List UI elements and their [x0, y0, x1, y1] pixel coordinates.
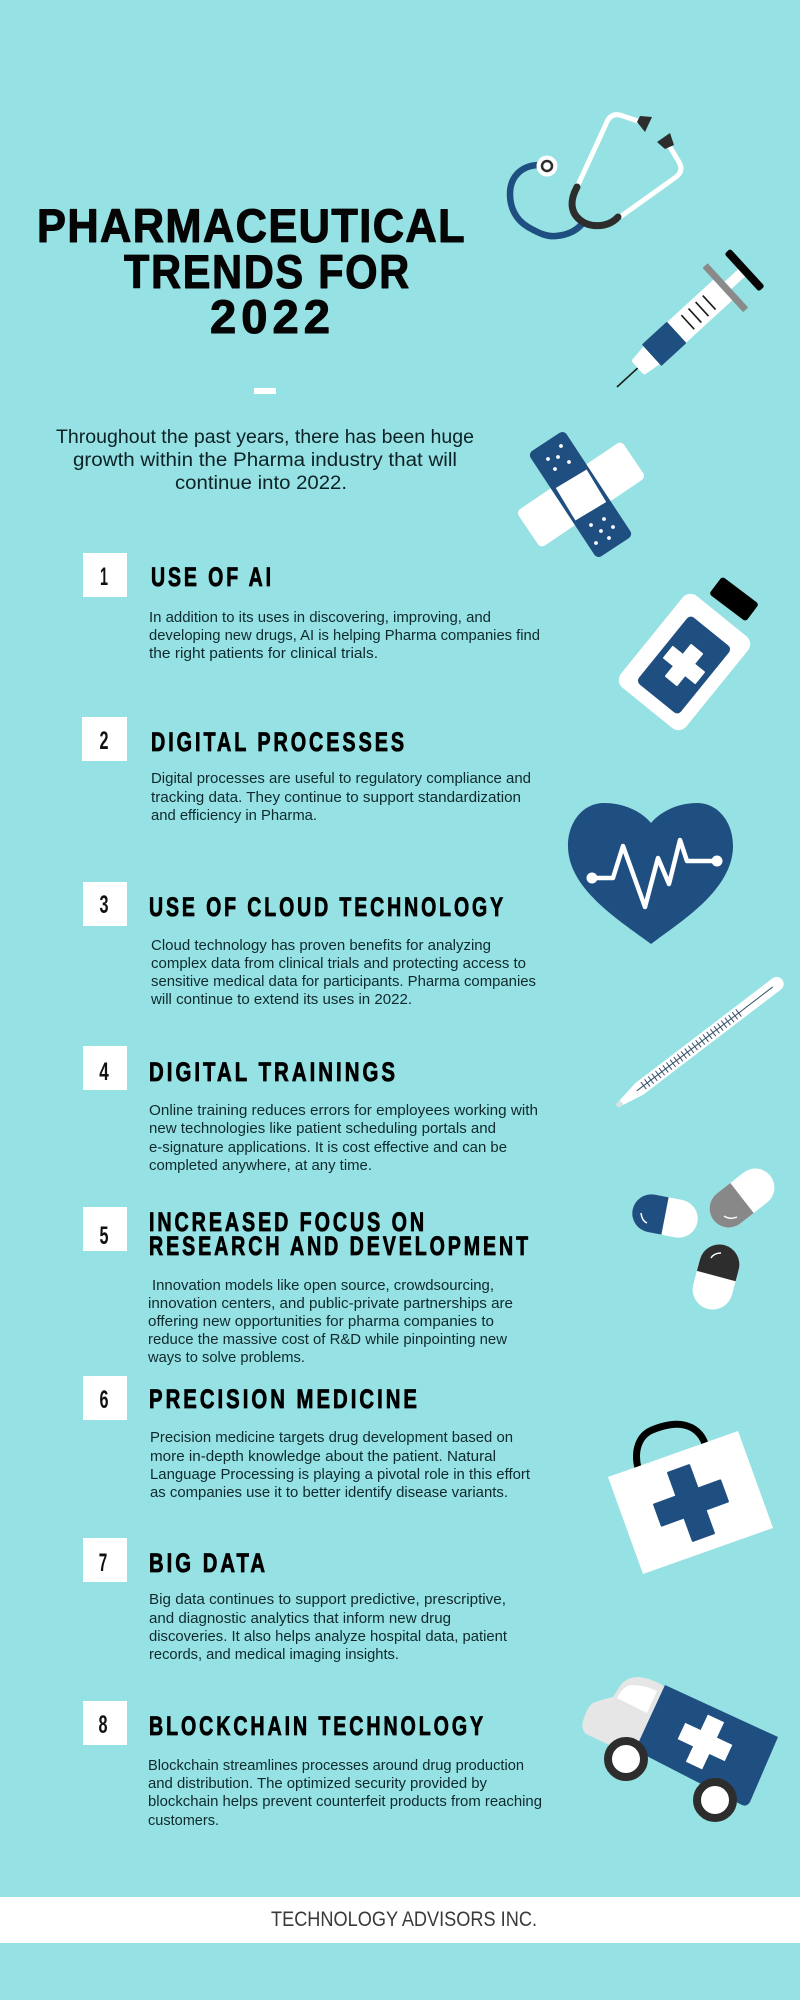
title: PHARMACEUTICAL	[37, 199, 466, 252]
body text 5: ways to solve problems.	[147, 1350, 305, 1366]
number badge 2	[82, 717, 127, 761]
item 5	[83, 1207, 531, 1366]
body text 8: Blockchain streamlines processes around drug production	[148, 1758, 524, 1774]
icon: medicine bottle	[615, 576, 759, 734]
body text 2: tracking data. They continue to support standardization	[151, 790, 521, 806]
body text 7: discoveries. It also helps analyze hospital data, patient	[149, 1629, 507, 1645]
body text 3: complex data from clinical trials and protecting access to	[151, 956, 526, 972]
footer text: TECHNOLOGY ADVISORS INC.	[271, 1907, 537, 1931]
icon: syringe	[597, 245, 768, 409]
icon: ambulance	[582, 1677, 778, 1818]
number badge 3: 3	[100, 891, 108, 919]
heading 5	[149, 1207, 531, 1261]
body text 7: Big data continues to support predictive, prescriptive,	[149, 1592, 506, 1608]
title accent dash	[254, 388, 276, 394]
heading 5: RESEARCH AND DEVELOPMENT	[149, 1231, 531, 1261]
item 2	[82, 717, 531, 824]
body text 6: as companies use it to better identify disease variants.	[150, 1485, 508, 1501]
title: TRENDS FOR	[124, 245, 411, 298]
blue pill	[629, 1191, 701, 1241]
body text 4: Online training reduces errors for employees working with	[149, 1103, 538, 1119]
gray pill	[702, 1161, 782, 1235]
body text 1: In addition to its uses in discovering, improving, and	[149, 610, 491, 626]
body text 5: offering new opportunities for pharma companies to	[148, 1314, 494, 1330]
body text 7: records, and medical imaging insights.	[149, 1647, 399, 1663]
body text 2	[151, 771, 531, 824]
number badge 1	[83, 553, 127, 597]
number badge 3	[83, 882, 127, 926]
black pill	[688, 1240, 744, 1314]
body text 4: completed anywhere, at any time.	[149, 1158, 372, 1174]
body text 3: sensitive medical data for participants. Pharma companies	[151, 974, 536, 990]
number badge 5: 5	[100, 1222, 109, 1250]
body text 2: Digital processes are useful to regulatory compliance and	[151, 771, 531, 787]
item 7	[83, 1538, 507, 1663]
body text 8: blockchain helps prevent counterfeit products from reaching	[148, 1794, 542, 1810]
item 6	[83, 1376, 530, 1501]
heading 6: PRECISION MEDICINE	[149, 1384, 420, 1414]
body text 5: innovation centers, and public-private partnerships are	[148, 1296, 513, 1312]
body text 4	[149, 1103, 538, 1174]
body text 8: customers.	[148, 1813, 219, 1829]
body text 6: more in-depth knowledge about the patient. Natural	[150, 1449, 496, 1465]
title	[37, 199, 466, 343]
intro text	[56, 427, 474, 494]
body text 3: will continue to extend its uses in 2022.	[150, 992, 412, 1008]
intro text: continue into 2022.	[175, 473, 347, 494]
body text 5: Innovation models like open source, crowdsourcing,	[152, 1278, 494, 1294]
body text 5: reduce the massive cost of R&D while pinpointing new	[148, 1332, 508, 1348]
number badge 6: 6	[100, 1386, 108, 1414]
footer band	[0, 1897, 800, 1943]
body text 6: Precision medicine targets drug development based on	[150, 1430, 513, 1446]
number badge 4: 4	[99, 1058, 109, 1086]
number badge 8	[83, 1701, 127, 1745]
body text 6	[150, 1430, 530, 1501]
icon: pills	[629, 1161, 782, 1314]
body text 1	[149, 610, 540, 662]
body text 4: new technologies like patient scheduling portals and	[149, 1121, 496, 1137]
icon: thermometer	[613, 974, 786, 1112]
number badge 8: 8	[98, 1711, 108, 1739]
body text 1: the right patients for clinical trials.	[149, 646, 378, 662]
item 3	[83, 882, 536, 1008]
title: 2022	[210, 290, 335, 343]
body text 6: Language Processing is playing a pivotal role in this effort	[150, 1467, 530, 1483]
body text 7: and diagnostic analytics that inform new drug	[149, 1611, 451, 1627]
number badge 5	[83, 1207, 127, 1251]
item 8	[83, 1701, 542, 1829]
item 1	[83, 553, 540, 662]
body text 8	[148, 1758, 542, 1829]
heading 7: BIG DATA	[149, 1548, 268, 1578]
heading 1: USE OF AI	[151, 562, 274, 592]
body text 3: Cloud technology has proven benefits for analyzing	[151, 938, 491, 954]
body text 8: and distribution. The optimized security provided by	[148, 1776, 488, 1792]
body text 3	[150, 938, 536, 1008]
heading 8: BLOCKCHAIN TECHNOLOGY	[149, 1711, 486, 1741]
body text 2: and efficiency in Pharma.	[151, 808, 317, 824]
number badge 6	[83, 1376, 127, 1420]
number badge 7: 7	[99, 1549, 107, 1577]
number badge 4	[83, 1046, 127, 1090]
number badge 7	[83, 1538, 127, 1582]
number badge 1: 1	[100, 563, 108, 591]
heading 4: DIGITAL TRAININGS	[149, 1057, 398, 1087]
heading 5: INCREASED FOCUS ON	[149, 1207, 427, 1237]
heading 3: USE OF CLOUD TECHNOLOGY	[149, 892, 506, 922]
intro text: Throughout the past years, there has been huge	[56, 427, 474, 448]
body text 4: e-signature applications. It is cost effective and can be	[149, 1140, 507, 1156]
heading 2: DIGITAL PROCESSES	[151, 727, 407, 757]
icon: bandage	[516, 430, 646, 559]
body text 1: developing new drugs, AI is helping Pharma companies find	[149, 628, 540, 644]
body text 7	[149, 1592, 507, 1663]
intro text: growth within the Pharma industry that will	[73, 450, 457, 471]
icon: heart with pulse	[568, 803, 733, 944]
body text 5	[147, 1278, 513, 1366]
icon: stethoscope	[510, 115, 681, 236]
number badge 2: 2	[100, 727, 108, 755]
icon: first aid kit	[608, 1424, 773, 1574]
item 4	[83, 1046, 538, 1174]
